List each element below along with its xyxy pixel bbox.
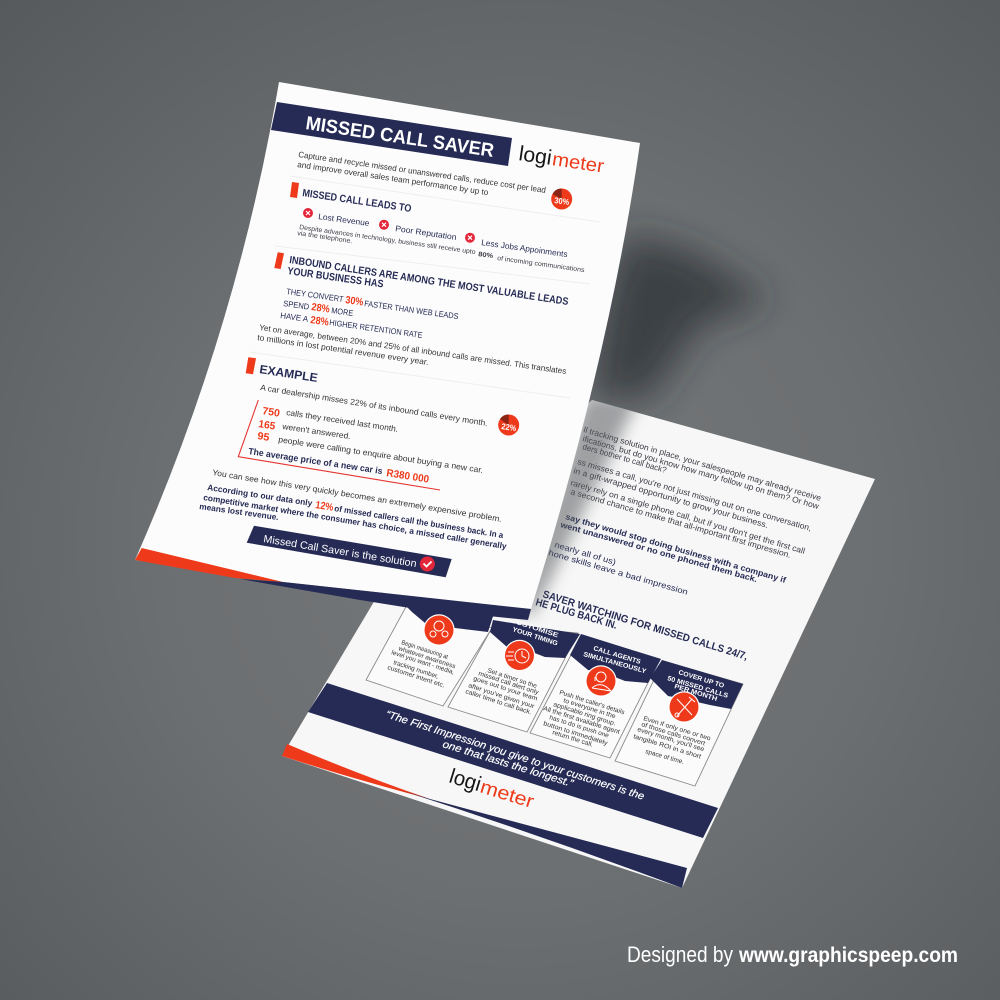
card: call agents simultaneously: SIMULTANEOUSLY <box>582 651 648 675</box>
card: call agents simultaneously <box>530 634 661 758</box>
average price: The average price of a new car is <box>248 446 383 476</box>
footer credit: www.graphicspeep.com <box>738 944 958 967</box>
closing paragraphs: 12% <box>315 499 335 514</box>
heading: missed call leads to: MISSED CALL LEADS TO <box>302 187 412 215</box>
example numbers: 750 <box>262 405 281 420</box>
back sheet body text: a second chance to make that all-important first impression. <box>569 487 792 560</box>
back sheet heading: HE PLUG BACK IN. <box>534 596 619 632</box>
card: customise your timing: after you've given your <box>467 682 536 711</box>
navy swoosh back <box>400 790 687 888</box>
card: customise your timing: Set a timer so the <box>486 667 538 690</box>
logo: logimeter bottom: logi <box>447 765 484 796</box>
navy swoosh front <box>240 579 531 620</box>
accent bar 2 <box>274 252 284 269</box>
consequences list: Less Jobs Appoinments <box>481 238 568 259</box>
intro text: Capture and recycle missed or unanswered calls, reduce cost per lead <box>298 150 547 195</box>
80% note <box>297 224 586 274</box>
intro text: and improve overall sales team performance by up to <box>297 160 489 197</box>
card: cover up to 50 missed calls: 50 MISSED CALLS <box>666 675 729 700</box>
closing paragraphs <box>199 468 508 551</box>
card: customise your timing: missed call alert only <box>477 670 540 697</box>
card: call agents simultaneously: has to do is push one <box>548 714 610 740</box>
card: call agents simultaneously: to everyone in the <box>562 697 617 720</box>
closing paragraphs: of missed callers call the business back. In a <box>334 503 504 540</box>
80% note: Despite advances in technology, business still receive upto <box>299 224 476 256</box>
back sheet body text: in a gift-wrapped opportunity to grow your business. <box>572 466 769 530</box>
card: call agents simultaneously: button to immediately <box>542 720 609 747</box>
card: call agents simultaneously: return the call. <box>551 729 594 749</box>
card: measure: customer intent etc. <box>386 664 446 690</box>
heading: inbound callers: YOUR BUSINESS HAS <box>287 265 384 290</box>
consequences list: Poor Reputation <box>395 224 458 242</box>
solution button: Missed Call Saver is the solution <box>263 533 418 570</box>
logo: logimeter bottom: meter <box>478 777 537 813</box>
example numbers: weren't answered. <box>281 422 351 441</box>
example numbers: 165 <box>258 418 276 433</box>
quote band <box>308 683 718 838</box>
stats list: SPEND <box>283 299 310 312</box>
80% note: of incoming communications <box>497 255 586 274</box>
card: call agents simultaneously: CALL AGENTS <box>592 645 642 666</box>
front sheet <box>135 82 640 620</box>
card: cover up to 50 missed calls <box>615 660 743 786</box>
example numbers: people were calling to enquire about buying a new car. <box>278 435 484 475</box>
quote band: “The First Impression you give to your customers is the <box>384 708 646 803</box>
title band <box>271 102 512 166</box>
card: cover up to 50 missed calls: PER MONTH <box>673 683 718 703</box>
example numbers <box>257 405 484 475</box>
orange corner back <box>282 744 430 799</box>
card: measure: whatever awareness <box>396 645 456 670</box>
accent bar 3 <box>246 357 256 374</box>
card: measure: Begin measuring at <box>400 639 449 661</box>
logo: logimeter top: logi <box>517 142 553 170</box>
footer credit <box>627 942 958 967</box>
stats list: HIGHER RETENTION RATE <box>329 318 424 340</box>
card: cover up to 50 missed calls: COVER UP TO <box>677 669 725 690</box>
average price <box>248 446 430 486</box>
card: customise your timing: CUSTOMISE <box>509 617 560 640</box>
back sheet body text: say they would stop doing business with a company if <box>564 512 787 585</box>
back sheet body text: went unanswered or no one phoned them back. <box>558 520 758 584</box>
badge: 22% <box>498 414 519 436</box>
title: MISSED CALL SAVER <box>304 113 496 162</box>
solution button <box>247 526 452 577</box>
badge: 30% <box>551 188 572 210</box>
80% note: via the telephone. <box>297 230 353 245</box>
logo: logimeter top <box>517 142 606 178</box>
quote band: one that lasts the longest.” <box>441 738 575 790</box>
closing paragraphs: According to our data only <box>207 482 313 508</box>
closing paragraphs: competitive market where the consumer has choice, a missed caller generally <box>203 492 508 551</box>
back sheet body text: ss misses a call, you're not just missing out on one conversation, <box>576 457 813 533</box>
consequences list <box>303 208 568 259</box>
example numbers: 95 <box>257 430 270 444</box>
stats list: FASTER THAN WEB LEADS <box>364 299 460 321</box>
card: call agents simultaneously: applicable ring group. <box>552 701 617 728</box>
front sheet paper <box>135 82 640 609</box>
red bracket <box>238 400 440 490</box>
back sheet body text: hone skills leave a bad impression <box>547 548 689 597</box>
stats list <box>280 287 460 340</box>
example numbers: calls they received last month. <box>286 408 399 434</box>
missed revenue paragraph: to millions in lost potential revenue every year. <box>257 333 429 367</box>
heading: inbound callers: INBOUND CALLERS ARE AMONG THE MOST VALUABLE LEADS <box>289 254 569 308</box>
back sheet body text: ll tracking solution in place, your salespeople may already receive <box>582 425 823 503</box>
logo: logimeter bottom <box>447 765 537 813</box>
card: customise your timing: YOUR TIMING <box>511 626 559 648</box>
card: customise your timing <box>448 617 580 732</box>
stats list: 28% <box>310 314 330 329</box>
back sheet body text: rarely rely on a single phone call, but if you don't get the first call <box>569 478 806 556</box>
card: call agents simultaneously: All the first available agent <box>542 705 621 736</box>
card: customise your timing: goes out to your team <box>472 675 538 703</box>
back sheet heading: SAVER WATCHING FOR MISSED CALLS 24/7, <box>541 588 749 663</box>
heading: example: EXAMPLE <box>259 362 319 385</box>
example intro: A car dealership misses 22% of its inbound calls every month. <box>260 383 488 428</box>
back sheet paper <box>282 400 875 888</box>
closing paragraphs: means lost revenue. <box>199 501 279 522</box>
missed revenue paragraph: Yet on average, between 20% and 25% of all inbound calls are missed. This translates <box>259 323 567 376</box>
cast shadow of front sheet on background <box>590 235 770 400</box>
stats list: 30% <box>345 294 365 309</box>
badge: 30%: 30% <box>554 195 570 207</box>
footer credit: Designed by <box>627 942 733 967</box>
closing paragraphs: You can see how this very quickly becomes an extremely expensive problem. <box>212 468 502 524</box>
80% note: 80% <box>478 251 494 260</box>
card: cover up to 50 missed calls: Even if only one or two <box>642 715 712 743</box>
accent bar 1 <box>290 182 299 198</box>
back sheet body text: ifications, but do you know how many follow up on them? Or how <box>581 434 820 511</box>
card: cover up to 50 missed calls: tangible ROI in a short <box>632 733 702 761</box>
orange corner front <box>135 548 283 582</box>
card: cover up to 50 missed calls: every month, you'll see <box>636 726 705 753</box>
stats list: MORE <box>331 306 354 318</box>
card: measure: tracking number, <box>392 659 439 680</box>
card: customise your timing: caller time to call back. <box>464 688 533 716</box>
back sheet body text: nearly all of us) <box>553 540 617 567</box>
logo: logimeter top: meter <box>551 149 606 178</box>
back sheet <box>282 395 875 888</box>
card: measure <box>366 600 495 706</box>
shadow of front sheet on back sheet <box>520 395 640 620</box>
average price: R380 000 <box>386 467 430 486</box>
badge: 22%: 22% <box>501 421 517 433</box>
card: cover up to 50 missed calls: of those calls convert <box>640 721 706 747</box>
card: call agents simultaneously: Push the caller's details <box>558 689 625 716</box>
stats list: THEY CONVERT <box>286 287 344 304</box>
stats list: 28% <box>311 301 331 316</box>
stats list: HAVE A <box>280 311 309 324</box>
card: measure: level you want - media, <box>390 649 455 676</box>
card: cover up to 50 missed calls: space of time. <box>644 748 685 766</box>
back sheet body text: ders bother to call back? <box>581 442 668 475</box>
back sheet body text <box>547 425 823 597</box>
consequences list: Lost Revenue <box>318 212 370 228</box>
